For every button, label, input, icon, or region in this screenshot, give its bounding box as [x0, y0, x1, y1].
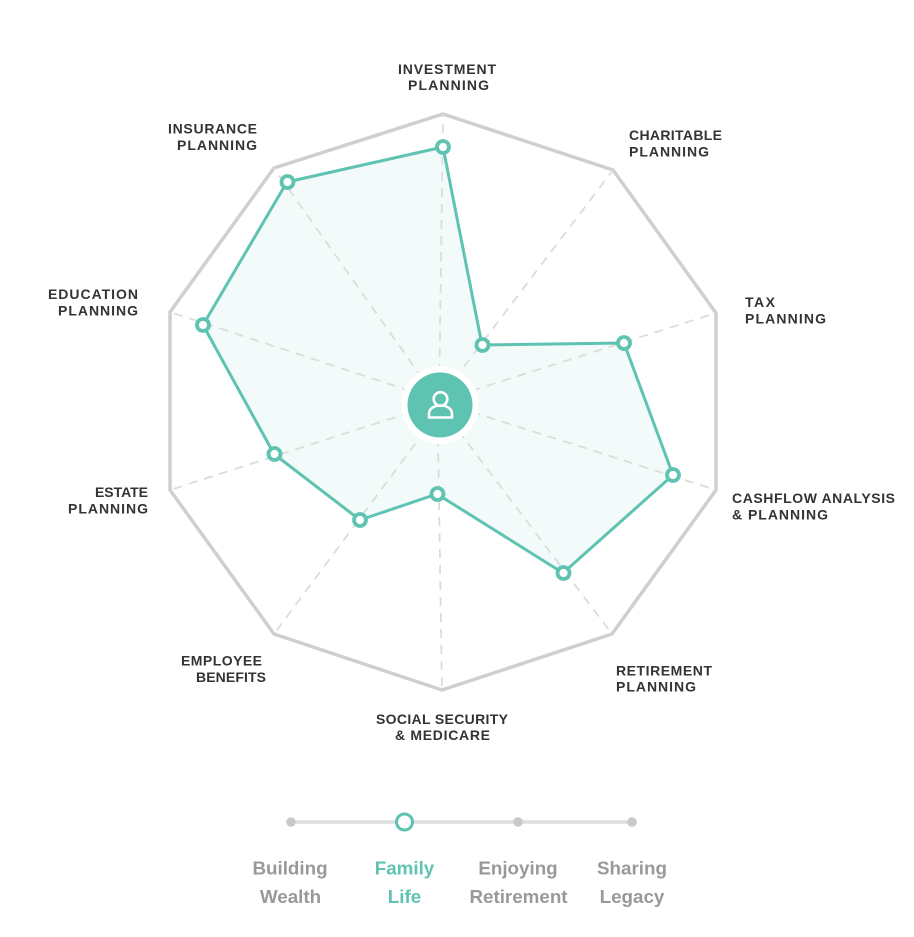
stage: building wealth: Wealth	[260, 886, 321, 907]
label: tax planning: PLANNING	[745, 310, 826, 326]
decagon outline	[170, 114, 716, 690]
label: retirement planning	[616, 662, 712, 694]
label: retirement planning: RETIREMENT	[616, 662, 712, 678]
stage: family life: Life	[388, 886, 421, 907]
label: investment planning: PLANNING	[408, 77, 489, 93]
label: estate planning	[68, 484, 148, 516]
data area fill	[203, 147, 673, 573]
timeline	[286, 814, 637, 830]
label: charitable planning: CHARITABLE	[629, 127, 722, 143]
label: employee benefits: BENEFITS	[196, 669, 266, 685]
data points	[197, 141, 679, 579]
label: cashflow analysis and planning: CASHFLOW ANALYSIS	[732, 490, 895, 506]
label: employee benefits	[181, 652, 266, 685]
label: insurance planning: PLANNING	[177, 137, 257, 153]
stage: enjoying retirement: Enjoying	[478, 858, 558, 878]
stage: building wealth: Building	[252, 858, 328, 878]
label: estate planning: PLANNING	[68, 500, 148, 516]
stage: sharing legacy: Sharing	[597, 858, 667, 878]
data outline	[203, 147, 673, 573]
label: social security and medicare: SOCIAL SECURITY	[376, 711, 509, 727]
label: tax planning: TAX	[745, 294, 776, 310]
label: education planning: EDUCATION	[48, 286, 138, 302]
icon: person in center circle	[401, 366, 479, 444]
label: social security and medicare	[376, 711, 509, 743]
label: cashflow analysis and planning: & PLANNING	[732, 506, 828, 522]
stage: sharing legacy: Legacy	[600, 886, 665, 907]
label: cashflow analysis and planning	[732, 490, 895, 522]
stage: family life: Family	[375, 858, 435, 878]
label: social security and medicare: & MEDICARE	[395, 727, 490, 743]
label: employee benefits: EMPLOYEE	[181, 652, 262, 668]
stage: enjoying retirement: Retirement	[469, 886, 568, 907]
label: estate planning: ESTATE	[95, 484, 148, 500]
active stage marker	[396, 814, 412, 830]
label: tax planning	[745, 294, 826, 326]
label: education planning	[48, 286, 138, 318]
label: insurance planning	[168, 120, 257, 153]
label: insurance planning: INSURANCE	[168, 120, 257, 136]
label: investment planning	[398, 61, 496, 93]
label: charitable planning: PLANNING	[629, 144, 709, 160]
radar chart	[170, 114, 716, 690]
label: investment planning: INVESTMENT	[398, 61, 496, 77]
label: retirement planning: PLANNING	[616, 678, 696, 694]
label: education planning: PLANNING	[58, 302, 138, 318]
label: charitable planning	[629, 127, 722, 160]
dashed spokes	[170, 114, 716, 690]
